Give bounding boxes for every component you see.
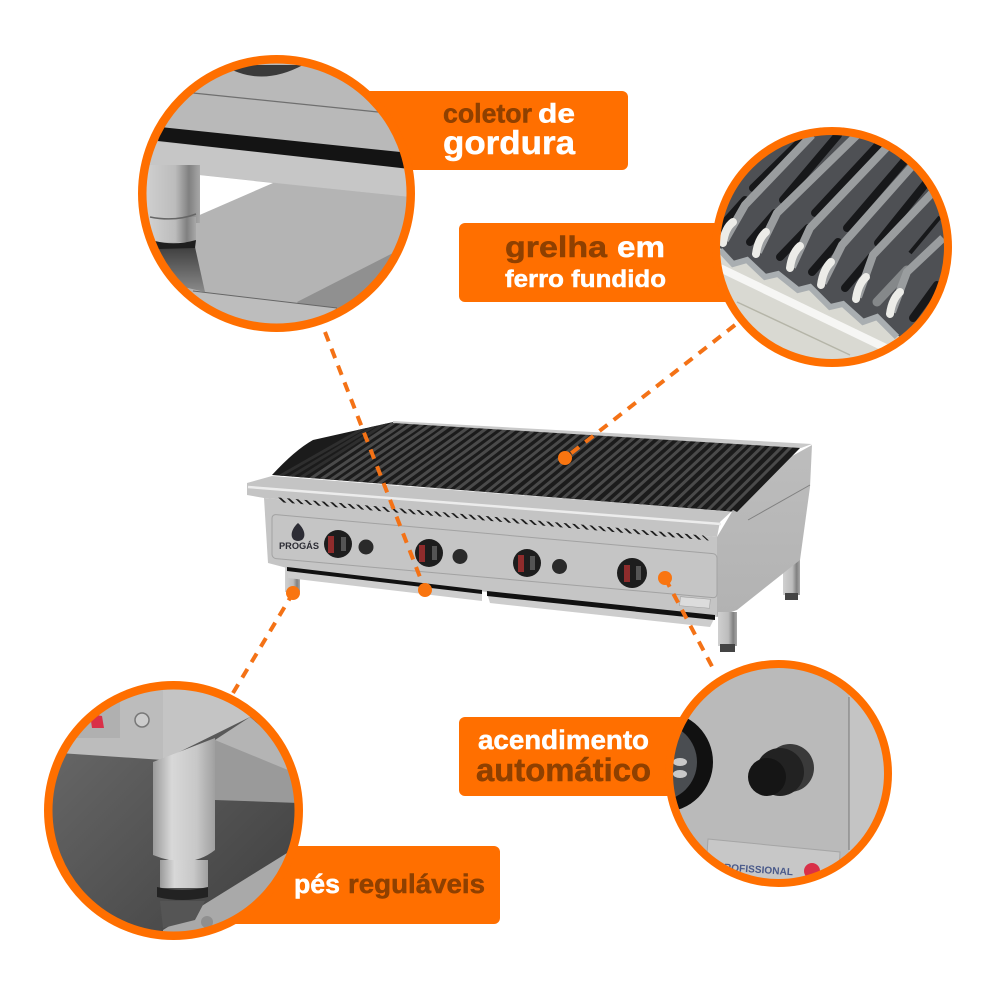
foot band line [150,214,196,219]
callout box: grelha em ferro fundido [459,223,749,302]
product: char-broiler grill [247,421,812,652]
white gap [200,175,273,215]
leader line: pés [233,593,293,693]
ledge line [737,302,850,355]
right side panel [717,445,812,617]
box [459,717,709,796]
red flame logo [804,863,820,879]
body left face [66,690,163,760]
callout box: pés reguláveis [220,846,500,924]
right panel [849,660,899,890]
body right face [163,690,250,758]
text: ferro fundido: ferro fundido [505,266,666,293]
corner panel [215,717,288,770]
text: PROFISSIONAL: PROFISSIONAL [717,862,793,878]
detail circle: automatic ignition [613,660,899,900]
foot reflection [160,901,205,928]
text: reguláveis: reguláveis [348,869,485,899]
wall reflection [215,740,300,803]
black slots [720,135,937,318]
white crescents [723,222,900,314]
leader line: grelha [565,325,735,458]
floor line stroke [193,291,337,308]
bottom ledge [163,853,305,950]
small button 1 [358,540,374,554]
sticker [704,839,840,900]
knob face [619,723,697,801]
front face [264,498,717,617]
photo contents [146,64,406,324]
ledge teeth band [720,250,897,337]
leg [153,738,215,861]
dark reflection [159,247,205,292]
box [459,223,749,302]
top-left grey [700,130,760,200]
ring [48,685,299,936]
faint left ribs [280,423,386,478]
text: de: de [538,98,575,128]
tray black slot left [287,567,482,594]
text: grelha: grelha [505,231,607,264]
black slot [158,127,410,169]
ribs [310,422,792,511]
text: gordura: gordura [443,124,576,161]
floor lower band [193,292,336,324]
dot: foot [286,586,300,600]
callout box: coletor de gordura [340,91,628,170]
callout box: acendimento automático [459,717,709,796]
lip crease [248,487,721,524]
text: coletor: coletor [443,98,532,128]
back leg right [783,555,800,595]
leader line: acendimento [665,578,715,672]
ledge [720,248,900,359]
knob 1 [324,530,352,558]
dot: grease tray [418,583,432,597]
text: automático: automático [476,752,651,788]
logo: PROGÁS: PROGÁS [279,541,319,551]
knob ring [613,712,713,812]
sticker [680,597,710,608]
leg [145,165,200,223]
small button 2 [452,549,468,564]
knob 4 [617,558,647,588]
knob marks 2 [673,770,687,778]
floor shadow [297,254,392,310]
foot band [150,217,196,242]
thin slot [910,217,940,253]
sticker piece [77,702,120,738]
ledge bolt [201,916,213,928]
rubber foot [155,240,196,249]
text: acendimento: acendimento [478,725,649,755]
rubber foot [157,887,208,900]
front lip [247,476,737,537]
leader line: coletor de gordura [325,332,425,590]
knob bottom [234,65,302,76]
grill ribs [280,422,792,511]
front right leg [718,612,737,646]
grey slot [877,270,907,302]
dot: grill [558,451,572,465]
photo contents [720,135,944,359]
front right foot [720,644,735,652]
knob 3 [513,549,541,577]
back leg foot [785,593,798,600]
tray left [287,566,482,601]
side panel crease [748,485,810,520]
grill surface [272,422,801,512]
small button 3 [552,559,567,574]
text: em: em [617,231,665,264]
button ring [756,748,804,796]
button back [766,744,814,792]
control panel outline [272,514,717,598]
knob marks [673,758,687,766]
box [340,91,628,170]
ring [142,59,411,328]
grill top rim [393,421,812,448]
red flame [91,716,104,728]
detail circle: cast iron grate [714,127,952,367]
dot: igniter [658,571,672,585]
vent slots [281,500,706,538]
button cap [748,758,786,796]
floor [150,183,410,330]
knob 2 [415,539,443,567]
ring [669,664,888,883]
detail circle: grease collector [140,55,420,340]
tray right [486,590,717,627]
foot chrome [160,860,208,888]
stripes [725,135,943,312]
photo contents [613,660,899,900]
ledge highlight [720,268,890,350]
ring [716,131,948,363]
box [220,846,500,924]
detail circle: adjustable foot [44,680,305,950]
photo contents [52,690,294,932]
bolt [135,713,149,727]
front left leg [285,566,300,592]
tray black slot right [487,591,715,620]
panel line [193,93,378,112]
text: pés: pés [294,869,340,899]
logo: flame [292,523,304,541]
panel edge [848,697,850,850]
lower lip [150,141,410,197]
